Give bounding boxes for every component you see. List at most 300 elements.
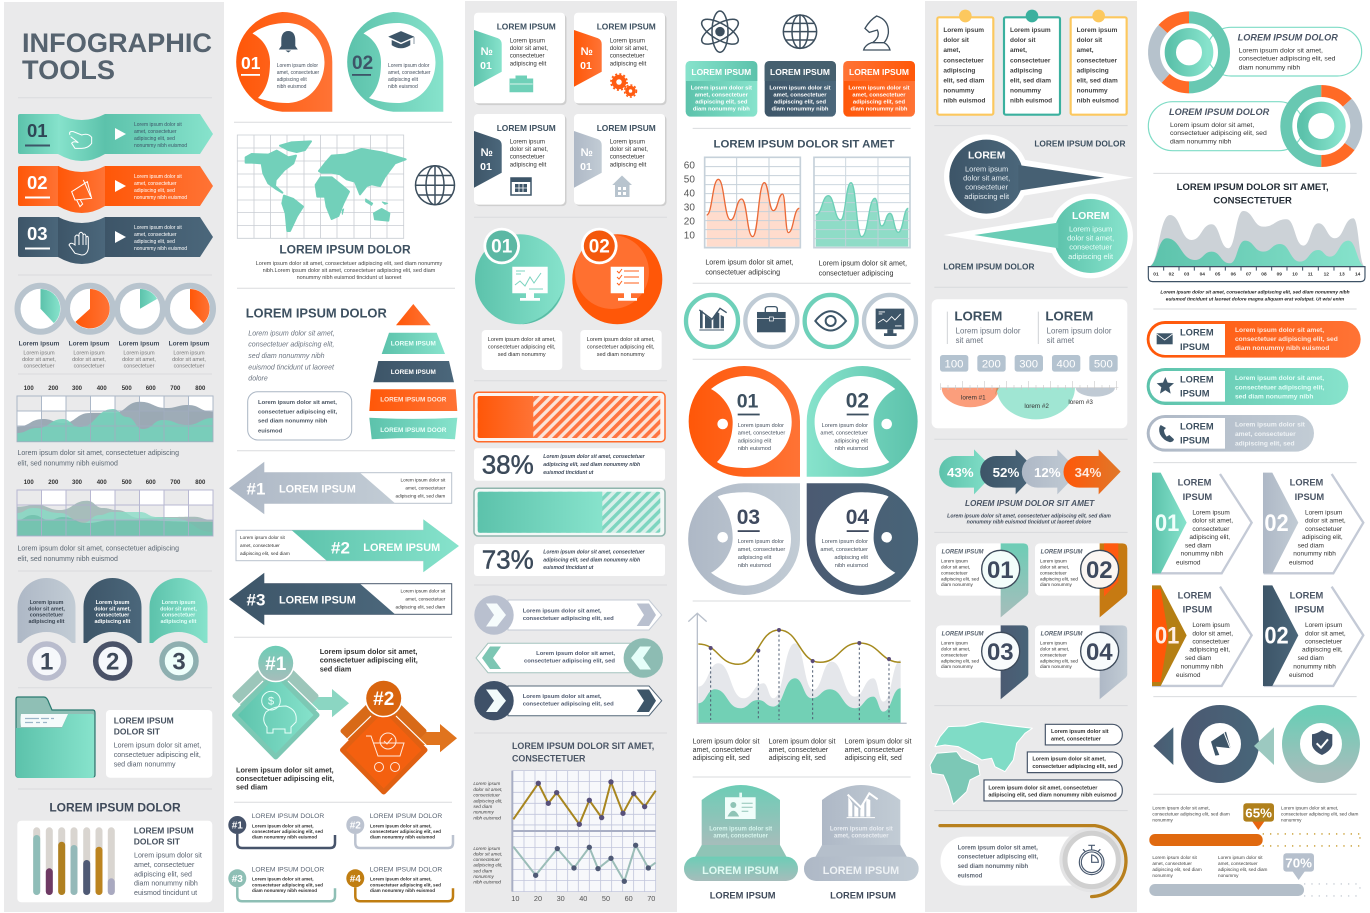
area chart 2: 700: [170, 480, 181, 486]
line charts: Lorem ipsum: [473, 846, 500, 851]
timeline area chart: 01: [1153, 272, 1159, 278]
captions: [693, 739, 911, 762]
bookmark 02: consectetuer: [1040, 570, 1067, 575]
captions: Lorem ipsum dolor sit amet,: [488, 337, 556, 343]
pie charts: dolor sit amet,: [72, 357, 106, 363]
badge teal: [684, 785, 798, 900]
card navy: amet, consectetuer: [773, 93, 827, 99]
chevron card 02 gray: 02: [1264, 510, 1289, 537]
text: map caption: [256, 243, 442, 281]
badge teal: Lorem ipsum dolor sit: [709, 827, 772, 833]
card navy: LOREM IPSUM: [770, 67, 830, 77]
cards with number tabs: [474, 13, 666, 206]
panel: column 3: [473, 13, 667, 903]
panel: big pin 01: Lorem ipsum dolor: [738, 423, 784, 429]
folder card: Lorem ipsum dolor sit amet,: [114, 742, 201, 750]
balloon teal: LOREM: [1072, 211, 1109, 222]
chevron card 02 navy: [1263, 585, 1363, 686]
bookmark 03: dolor sit amet,: [941, 647, 970, 652]
sticky note 2: [1004, 10, 1060, 115]
cards with number tabs: Lorem ipsum: [610, 37, 645, 44]
bookmark 03: [936, 625, 1028, 699]
chart: teal: [814, 157, 910, 277]
badge teal: LOREM IPSUM: [702, 865, 779, 877]
pin 02: adipiscing elit: [388, 77, 419, 83]
ruler card: LOREM: [954, 309, 1002, 324]
heading: timeline chart: LOREM IPSUM DOLOR SIT AMET,: [1177, 182, 1329, 193]
chevron bar 3: [474, 681, 662, 720]
icon ring: eye: [805, 295, 857, 347]
numbered item #1: consectetuer adipiscing elit, sed: [252, 829, 323, 834]
timeline area chart: 14: [1355, 272, 1361, 278]
panel: big pin 01: amet, consectetuer: [738, 430, 785, 436]
bookmark 01: Lorem ipsum: [941, 559, 968, 564]
chart: teal: Lorem ipsum dolor sit amet,: [819, 259, 907, 267]
arrow 1: adipiscing elit, sed diam: [396, 493, 445, 498]
balloon teal: Lorem ipsum: [1069, 225, 1112, 234]
panel: column 6 bottom: [1149, 463, 1363, 896]
chevron card 02 gray: Lorem ipsum: [1305, 509, 1342, 516]
arch cards: 3: [172, 648, 186, 676]
card teal: amet, consectetuer: [695, 93, 749, 99]
chevron card 02 gray: consectetuer: [1305, 526, 1343, 533]
numbered item #4: [346, 866, 453, 901]
captions: consectetuer adipiscing elit,: [587, 345, 655, 351]
ribbon 03: [18, 217, 213, 264]
contact pill: phone: amet, consectetuer: [1235, 431, 1296, 438]
panel: big pin 02: 02: [846, 389, 869, 412]
timer callout: [940, 826, 1126, 897]
callouts: amet, consectetuer: [1051, 737, 1102, 743]
ribbon 01: adipiscing elit, sed: [134, 136, 175, 142]
text block with pyramid: Lorem ipsum dolor sit amet,: [258, 400, 337, 406]
chevron bar 2: [476, 638, 663, 678]
bookmark 04: adipiscing elit, sed: [1040, 658, 1078, 663]
bar card: DOLOR SIT: [134, 836, 181, 846]
diamond #1: $: [268, 696, 274, 708]
chevron card 01 orange: IPSUM: [1183, 605, 1212, 615]
balloon teal: [943, 194, 1133, 278]
text block with pyramid: LOREM IPSUM DOOR: [380, 396, 447, 403]
area chart 2: Lorem ipsum dolor sit amet, consectetuer adipiscing: [18, 546, 179, 552]
chevron card 02 navy: dolor sit amet,: [1305, 630, 1346, 637]
text block with pyramid: sed diam nonummy nibh: [258, 419, 328, 425]
percent arrows: 34%: [1075, 465, 1101, 480]
arrow 3: Lorem ipsum dolor sit: [400, 589, 446, 594]
ribbon 01: 01: [27, 120, 48, 141]
numbered item #1: #1: [232, 821, 243, 832]
line charts: sed diam: [473, 868, 492, 873]
cards with number tabs: №: [481, 147, 493, 159]
chevron card 02 gray: IPSUM: [1295, 492, 1324, 502]
arch cards: adipiscing elit: [29, 619, 65, 625]
sticky note 2: nonummy: [1010, 87, 1041, 94]
diamond #2: [236, 679, 457, 792]
numbered item #2: consectetuer adipiscing elit, sed: [370, 829, 441, 834]
bookmark 02: adipiscing elit, sed: [1040, 576, 1078, 581]
area chart 1: 700: [170, 386, 181, 392]
cards with number tabs: LOREM IPSUM: [597, 123, 656, 133]
donut callout 1: diam nonummy nibh: [1239, 64, 1300, 71]
chevron card 02 navy: euismod: [1289, 672, 1314, 679]
captions: Lorem ipsum dolor sit: [693, 739, 759, 746]
cards with number tabs: LOREM IPSUM: [497, 22, 556, 32]
chevron card 02 navy: LOREM: [1290, 590, 1324, 600]
line charts: adipiscing elit,: [473, 798, 503, 803]
ribbon 03: Lorem ipsum dolor sit: [134, 225, 182, 231]
sticky note 3: adipiscing: [1077, 67, 1109, 74]
numbered item #3: diam nonummy nibh euismod: [252, 888, 317, 893]
arrow 2: adipiscing elit, sed diam: [240, 551, 290, 556]
area chart 2: 500: [122, 480, 132, 486]
balloon navy: dolor sit amet,: [963, 173, 1010, 182]
ruler card: sit amet: [956, 336, 984, 345]
timeline area chart: 07: [1246, 272, 1252, 278]
contact pill: phone: [1147, 415, 1314, 452]
cards with number tabs: adipiscing elit: [610, 161, 647, 168]
panel: column 5 bottom: [930, 449, 1128, 897]
chevron card 02 navy: adipiscing elit,: [1302, 647, 1343, 654]
donut callout 2: [1148, 91, 1356, 161]
area chart 1: 800: [195, 386, 206, 392]
percent arrows: [939, 449, 1121, 494]
line charts: nibh euismod: [473, 815, 501, 820]
chevron bar 1: consectetuer adipiscing elit, sed: [523, 616, 614, 622]
badge gray: LOREM IPSUM: [830, 890, 896, 900]
panel: big pin 04: nibh euismod: [835, 563, 868, 569]
line charts: consectetuer: [473, 793, 500, 798]
text block with pyramid: euismod: [258, 428, 283, 434]
cards with number tabs: 01: [580, 161, 592, 173]
cards with number tabs: consectetuer: [510, 53, 545, 60]
card navy: Lorem ipsum dolor sit: [769, 85, 831, 91]
bookmark 01: dolor sit amet,: [941, 565, 970, 570]
card orange: adipiscing elit, sed: [853, 99, 905, 105]
ruler card: 300: [1019, 359, 1038, 371]
pin 01: amet, consectetuer: [277, 70, 320, 76]
numbered item #2: LOREM IPSUM DOLOR: [370, 813, 442, 820]
donut callout 2: LOREM IPSUM DOLOR: [1169, 107, 1270, 117]
ribbon 02: nonummy nibh euismod: [134, 195, 187, 201]
cards with number tabs: dolor sit amet,: [610, 45, 648, 52]
timeline area chart: 03: [1184, 272, 1190, 278]
text: map caption: nibh.Lorem ipsum dolor sit amet, consectetuer adipiscing elit, sed diam: [263, 268, 436, 274]
cards with number tabs: adipiscing elit: [510, 60, 547, 67]
callouts: adipiscing elit, sed diam nonummy nibh euismod: [988, 793, 1117, 799]
bookmark 04: dolor sit amet,: [1040, 647, 1069, 652]
captions: sed diam nonummy: [498, 352, 546, 358]
icon: globe: [416, 166, 454, 205]
captions: Lorem ipsum dolor sit: [845, 739, 911, 746]
chevron card 02 gray: nonummy nibh: [1293, 551, 1336, 558]
card navy: adipiscing elit, sed: [774, 99, 826, 105]
contact pill: mail: IPSUM: [1180, 342, 1210, 352]
pie charts: consectetuer: [74, 364, 105, 370]
text: percent caption: [947, 499, 1111, 526]
captions: adipiscing elit, sed: [693, 755, 750, 762]
bookmark 02: [1035, 543, 1127, 617]
captions: sed diam nonummy: [597, 352, 645, 358]
progress 65%: 65%: [1245, 805, 1272, 820]
bookmark 01: [936, 543, 1028, 617]
diamond #1: consectetuer adipiscing elit,: [320, 656, 418, 665]
sticky note 2: nibh euismod: [1010, 97, 1052, 104]
panel: big pin 03: adipiscing elit: [738, 555, 772, 561]
timeline area chart: 05: [1215, 272, 1221, 278]
heading: line charts: LOREM IPSUM DOLOR SIT AMET,: [512, 741, 654, 751]
chevron card 01 orange: euismod: [1176, 672, 1201, 679]
y axis labels: [684, 160, 695, 241]
area chart 1: elit, sed nonummy nibh euismod: [18, 460, 118, 468]
arch cards: adipiscing elit: [95, 619, 131, 625]
captions: Lorem ipsum dolor sit: [769, 739, 835, 746]
ruler card: [932, 299, 1127, 428]
line charts: 50: [602, 894, 610, 903]
pie charts: Lorem ipsum: [169, 340, 210, 348]
progress bar 38%: [474, 392, 665, 481]
arch cards: Lorem ipsum: [96, 600, 130, 606]
text block with pyramid: LOREM IPSUM DOOR: [380, 427, 447, 434]
panel: column 1: [16, 28, 213, 902]
arrow 1: amet, consectetuer: [405, 486, 446, 491]
arch cards: consectetuer: [30, 613, 64, 619]
progress bar 38%: euismod tincidunt ut: [543, 470, 594, 476]
sticky note 3: amet,: [1077, 47, 1094, 54]
line charts: dolor sit amet,: [473, 787, 503, 792]
balloon teal: adipiscing elit: [1068, 252, 1114, 261]
card orange: [843, 61, 915, 117]
y axis labels: 30: [684, 202, 695, 213]
area chart 2: 400: [97, 480, 107, 486]
numbered item #3: Lorem ipsum dolor sit amet,: [252, 877, 314, 882]
arrow 1: Lorem ipsum dolor sit: [400, 478, 446, 483]
chevron card 01 orange: Lorem ipsum: [1192, 622, 1230, 629]
ribbon 01: Lorem ipsum dolor sit: [134, 122, 182, 128]
chevron card 01 teal: nonummy nibh: [1181, 551, 1224, 558]
ruler card: lorem #3: [1068, 399, 1093, 406]
area chart 2: 600: [146, 480, 156, 486]
icon ring: briefcase: [745, 295, 797, 347]
numbered item #2: #2: [350, 821, 361, 832]
donut callout 1: consectetuer adipiscing elit, sed: [1239, 56, 1336, 63]
panel: big pin 02: amet, consectetuer: [820, 430, 868, 436]
line charts: 70: [647, 894, 655, 903]
numbered item #4: consectetuer adipiscing elit, sed: [370, 882, 441, 887]
chart: orange: [705, 157, 801, 276]
captions: consectetuer adipiscing elit,: [488, 345, 556, 351]
progress 65%: nonummy: [1281, 818, 1302, 823]
text: map caption: nonummy nibh euismod tincidunt ut laoreet: [297, 275, 402, 281]
ruler card: Lorem ipsum dolor: [956, 327, 1021, 336]
balloon navy: LOREM: [968, 151, 1005, 162]
panel: big pin 01: [689, 366, 800, 477]
line charts: 10: [511, 894, 519, 903]
bookmark 04: [1035, 625, 1127, 699]
ribbon 03: nonummy nibh euismod: [134, 246, 187, 252]
arch cards: 2: [106, 648, 119, 676]
chevron card 01 teal: consectetuer: [1192, 526, 1230, 533]
area chart 1: 200: [48, 386, 59, 392]
timeline area chart: euismod tincidunt ut laoreet dolore magna aliquam erat volutpat. Ut wisi enim: [1166, 297, 1345, 303]
text block with pyramid: consectetuer adipiscing elit,: [258, 409, 338, 415]
cards with number tabs: adipiscing elit: [610, 60, 647, 67]
chevron card 01 teal: Lorem ipsum: [1192, 509, 1230, 516]
panel: big pin 02: adipiscing elit: [834, 438, 868, 444]
arrow 2: LOREM IPSUM: [363, 542, 440, 554]
area chart 1: [17, 386, 213, 468]
area chart 1: 300: [72, 386, 83, 392]
bookmark 04: Lorem ipsum: [1040, 641, 1067, 646]
panel: column 4 bottom: [684, 601, 919, 900]
cards with number tabs: 01: [580, 60, 592, 72]
sticky note 3: [1071, 10, 1127, 115]
chevron card 01 orange: sed diam: [1185, 655, 1211, 662]
timeline area chart: [1148, 211, 1365, 303]
text block with pyramid: consectetuer adipiscing elit,: [248, 342, 334, 349]
bar card: adipiscing elit, sed: [134, 870, 192, 878]
donut callout 2: consectetuer adipiscing elit, sed: [1170, 130, 1267, 137]
sticky note 2: amet,: [1010, 47, 1027, 54]
sticky note 3: dolor sit: [1077, 37, 1103, 44]
numbered item #4: LOREM IPSUM DOLOR: [370, 867, 442, 874]
chevron card 02 navy: 02: [1264, 623, 1289, 650]
percent arrows: 52%: [993, 465, 1019, 480]
chevron card 01 teal: adipiscing elit,: [1189, 534, 1230, 541]
timeline area chart: 08: [1261, 272, 1267, 278]
timeline area chart: 13: [1339, 272, 1345, 278]
ribbon 01: amet, consectetuer: [134, 129, 177, 135]
cards with number tabs: Lorem ipsum: [510, 138, 545, 145]
ruler card: 100: [945, 359, 963, 371]
sticky note 1: consectetuer: [943, 57, 984, 64]
area chart 2: 800: [195, 480, 206, 486]
text: percent caption: Lorem ipsum dolor sit amet, consectetuer adipiscing elit, sed diam: [947, 513, 1111, 519]
numbered item #3: LOREM IPSUM DOLOR: [252, 867, 324, 874]
chart: orange: Lorem ipsum dolor sit amet,: [705, 258, 794, 266]
chevron card 02 gray: [1263, 473, 1363, 573]
arrow 3: amet, consectetuer: [405, 597, 446, 602]
card teal: diam nonummy nibh: [693, 106, 750, 112]
sticky note 2: elit, sed diam: [1010, 77, 1051, 84]
bookmark 03: 03: [987, 639, 1014, 666]
pin 01: adipiscing elit: [277, 77, 307, 83]
progress 65%: consectetuer adipiscing elit, sed diam: [1281, 812, 1358, 817]
chevron card 01 orange: nonummy nibh: [1181, 663, 1224, 670]
contact pill: star: consectetuer adipiscing elit,: [1235, 384, 1325, 391]
panel: big pin 04: adipiscing elit: [834, 555, 868, 561]
numbered item #4: #4: [350, 874, 361, 885]
sticky note 2: adipiscing: [1010, 67, 1042, 74]
progress bar 73%: 73%: [482, 544, 534, 574]
card orange: LOREM IPSUM: [849, 67, 909, 77]
ring teal with shield icon: [1254, 714, 1351, 774]
contact pill: star: [1147, 368, 1348, 405]
cards with number tabs: 01: [480, 60, 492, 72]
cards with number tabs: LOREM IPSUM: [597, 22, 656, 32]
text: map caption: Lorem ipsum dolor sit amet, consectetuer adipiscing elit, sed diam nonummy: [256, 261, 442, 267]
text block with pyramid: [246, 304, 457, 440]
cards with number tabs: Lorem ipsum: [610, 138, 645, 145]
bookmark 01: LOREM IPSUM: [942, 549, 985, 555]
bookmark 02: diam nonummy: [1040, 582, 1072, 587]
chevron bar 2: Lorem ipsum dolor sit amet,: [536, 651, 615, 657]
chart: orange: consectetuer adipiscing: [705, 268, 780, 276]
line charts: nonummy: [473, 874, 494, 879]
chevron card 01 teal: dolor sit amet,: [1192, 518, 1233, 525]
diamond #1: Lorem ipsum dolor sit amet,: [320, 647, 417, 656]
balloon teal: LOREM IPSUM DOLOR: [943, 262, 1034, 272]
panel: big pin 04: 04: [846, 506, 869, 529]
line charts: adipiscing elit,: [473, 863, 503, 868]
arch cards: dolor sit amet,: [28, 606, 65, 612]
chart: teal: consectetuer adipiscing: [819, 269, 893, 277]
text: percent caption: LOREM IPSUM DOLOR SIT AMET: [965, 499, 1095, 508]
title: [22, 28, 212, 85]
sticky note 1: [937, 10, 993, 115]
panel: column 2: [228, 12, 459, 901]
chevron card 02 navy: sed diam: [1298, 655, 1324, 662]
callouts: consectetuer adipiscing elit, sed: [1032, 764, 1117, 770]
line charts: [473, 771, 656, 903]
sticky note 3: elit, sed diam: [1077, 77, 1118, 84]
diamond #2: #2: [373, 689, 394, 710]
progress bar 38%: 38%: [482, 449, 534, 479]
line charts: 30: [557, 894, 565, 903]
chevron bar 3: consectetuer adipiscing elit, sed: [523, 702, 614, 708]
sticky note 1: elit, sed diam: [943, 77, 985, 84]
timer callout: consectetuer adipiscing elit,: [958, 855, 1038, 861]
progress 65%: nonummy: [1152, 818, 1173, 823]
pin 01: 01: [241, 53, 261, 73]
numbered item #2: Lorem ipsum dolor sit amet,: [370, 823, 432, 828]
progress 65%: [1149, 803, 1360, 846]
world map: [237, 135, 406, 238]
numbered item #1: [228, 813, 335, 848]
line charts: nibh euismod: [473, 880, 501, 885]
bookmark 02: dolor sit amet,: [1040, 565, 1069, 570]
percent arrows: 43%: [947, 465, 974, 480]
chevron card 01 orange: dolor sit amet,: [1192, 630, 1233, 637]
progress 70%: nonummy: [1152, 873, 1173, 878]
sticky note 1: amet,: [943, 47, 960, 54]
chevron card 02 gray: euismod: [1289, 559, 1314, 566]
progress bar 73%: Lorem ipsum dolor sit amet, consectetuer: [543, 550, 646, 556]
progress 70%: nonummy: [1218, 873, 1239, 878]
arrow 1: #1: [246, 479, 265, 498]
panel: big pin 02: [807, 366, 918, 477]
panel: column 6 top: [1147, 17, 1365, 452]
pin 02: nibh euismod: [388, 84, 418, 90]
ruler card: lorem #1: [961, 394, 986, 401]
balloon navy: adipiscing elit: [964, 192, 1010, 201]
pin 02: [347, 12, 443, 112]
cards with number tabs: Lorem ipsum: [510, 37, 545, 44]
area chart 1: 500: [122, 386, 132, 392]
badge gray: [804, 785, 919, 900]
cards with number tabs: №: [581, 46, 593, 58]
diamond #2: Lorem ipsum dolor sit amet,: [236, 766, 334, 775]
bookmark 03: consectetuer: [941, 652, 968, 657]
contact pill: mail: Lorem ipsum dolor sit amet,: [1235, 327, 1324, 334]
arch cards: adipiscing elit: [161, 619, 197, 625]
contact pill: star: Lorem ipsum dolor sit amet,: [1235, 375, 1324, 382]
donut callout 2: diam nonummy nibh: [1170, 138, 1232, 145]
sticky note 2: Lorem ipsum: [1010, 27, 1051, 34]
sticky note 3: nibh euismod: [1077, 97, 1119, 104]
layered area chart: [688, 613, 907, 723]
contact pill: phone: LOREM: [1180, 421, 1214, 431]
panel: big pin 03: [688, 483, 800, 595]
